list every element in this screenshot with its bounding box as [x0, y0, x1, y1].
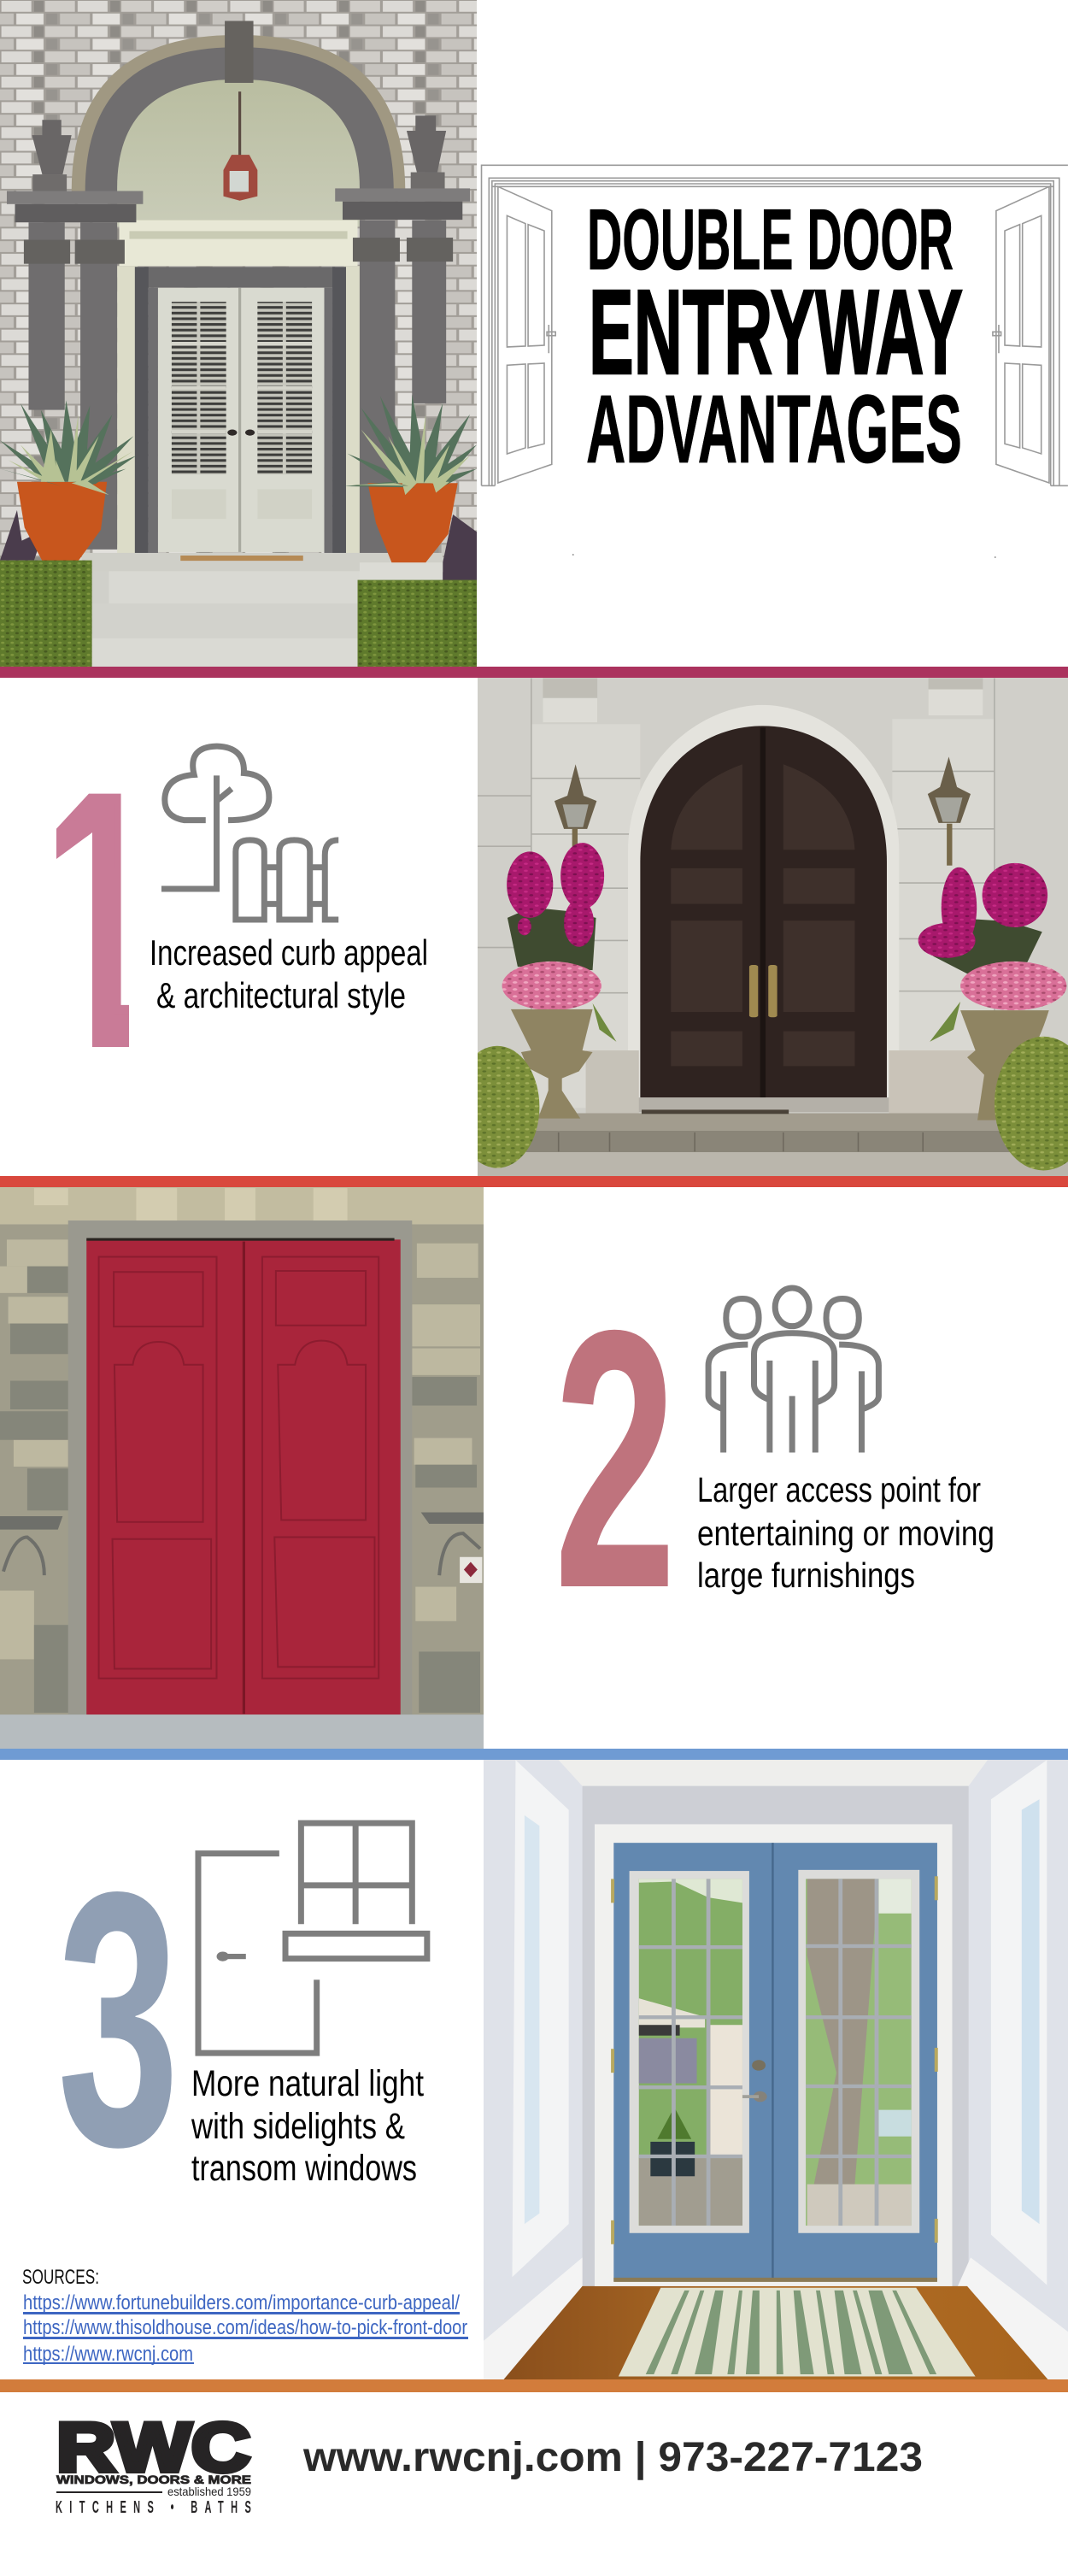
urns [511, 1009, 593, 1119]
number 3: 3 [57, 1816, 179, 2221]
footer logo: RWC: RWC [56, 2409, 250, 2486]
footer logo: RWC: KITCHENS • BATHS [56, 2498, 251, 2517]
illustration: open double door frame [482, 165, 1068, 485]
flowers [508, 908, 1042, 973]
panel: advantage 1 [38, 721, 428, 1124]
panel: advantage 3 [57, 1816, 427, 2221]
sources list [22, 2266, 468, 2366]
divider bar: blue [0, 1749, 1068, 1760]
title [586, 192, 963, 483]
sources list: https://www.rwcnj.com [23, 2343, 193, 2366]
sources list: https://www.thisoldhouse.com/ideas/how-to-pick-front-door [23, 2316, 467, 2339]
icon: group of people [708, 1288, 878, 1452]
photo: red double door in stone wall [0, 1186, 487, 1751]
text: advantage 3 [191, 2063, 424, 2189]
panel: hero title with open doors illustration [482, 165, 1068, 558]
text: advantage 2: Larger access point for [697, 1470, 981, 1509]
text: advantage 2: large furnishings [697, 1556, 915, 1595]
number 2: 2 [554, 1255, 677, 1665]
text: advantage 2 [697, 1470, 995, 1595]
photo: blue french doors in bright hallway [484, 1760, 1068, 2380]
text: advantage 1: Increased curb appeal [150, 932, 428, 973]
text: advantage 1 [150, 932, 428, 1015]
text: advantage 1: & architectural style [156, 975, 406, 1015]
sources list: SOURCES: [22, 2266, 99, 2289]
divider bar: orange [0, 2379, 1068, 2392]
text: advantage 3: with sidelights & [191, 2106, 405, 2147]
sources list: https://www.fortunebuilders.com/importance-curb-appeal/ [23, 2291, 460, 2314]
footer logo: RWC: established 1959 [167, 2485, 251, 2498]
icon: tree and fence [161, 746, 338, 920]
panel: advantage 2 [554, 1255, 995, 1665]
text: advantage 2: entertaining or moving [697, 1514, 995, 1553]
number 1: 1 [38, 721, 158, 1124]
text: advantage 3: transom windows [191, 2148, 417, 2189]
text: advantage 3: More natural light [191, 2063, 424, 2104]
divider bar: red [0, 1176, 1068, 1187]
divider bar: magenta [0, 667, 1068, 678]
footer logo: RWC [56, 2409, 251, 2517]
photo: arched dark wood double door [455, 677, 1068, 1178]
photo: grey entry with white double door [0, 0, 477, 669]
lanterns [555, 764, 596, 829]
icon: door with window and sill [198, 1823, 427, 2053]
footer logo: RWC: WINDOWS, DOORS & MORE [56, 2473, 251, 2486]
footer contact line: www.rwcnj.com | 973-227-7123 [302, 2435, 923, 2480]
